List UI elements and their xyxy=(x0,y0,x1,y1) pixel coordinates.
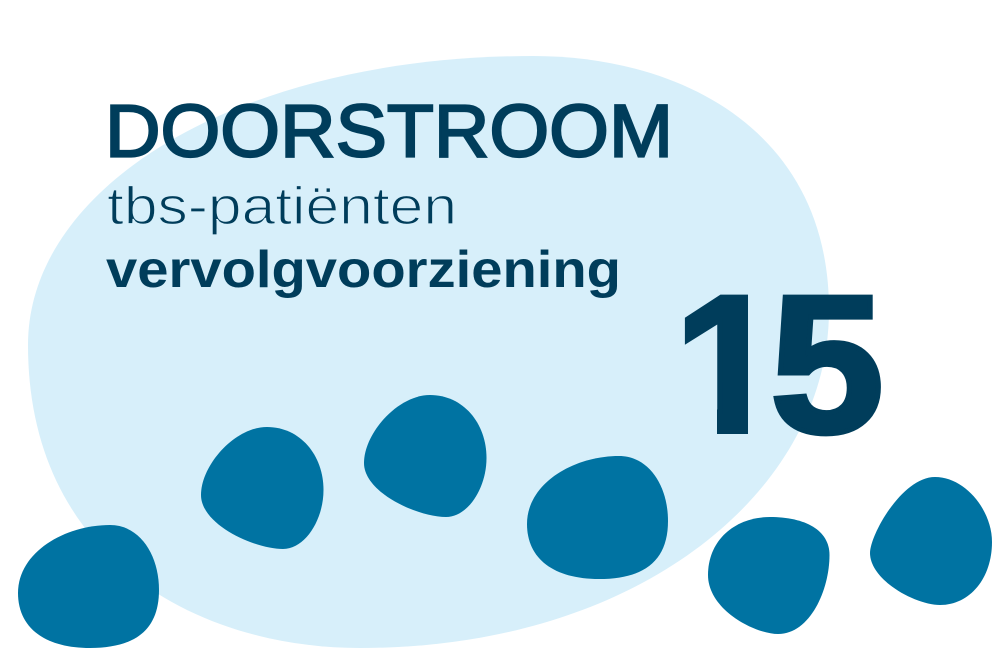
number: 15 xyxy=(684,294,881,436)
patient dots xyxy=(18,395,992,648)
dot 6 xyxy=(870,477,992,605)
number: 15: 5 xyxy=(770,255,884,474)
dot 1 xyxy=(18,525,159,648)
number: 15: 1 xyxy=(674,255,783,474)
dot 4 xyxy=(527,456,668,579)
subheading: tbs-patiënten: tbs-patiënten xyxy=(107,177,457,236)
subheading: vervolgvoorziening: vervolgvoorziening xyxy=(106,241,621,299)
dot 2 xyxy=(201,427,324,549)
background blob xyxy=(28,56,829,648)
dot 5 xyxy=(708,517,830,634)
heading: DOORSTROOM: DOORSTROOM xyxy=(105,90,673,172)
dot 3 xyxy=(364,395,486,517)
